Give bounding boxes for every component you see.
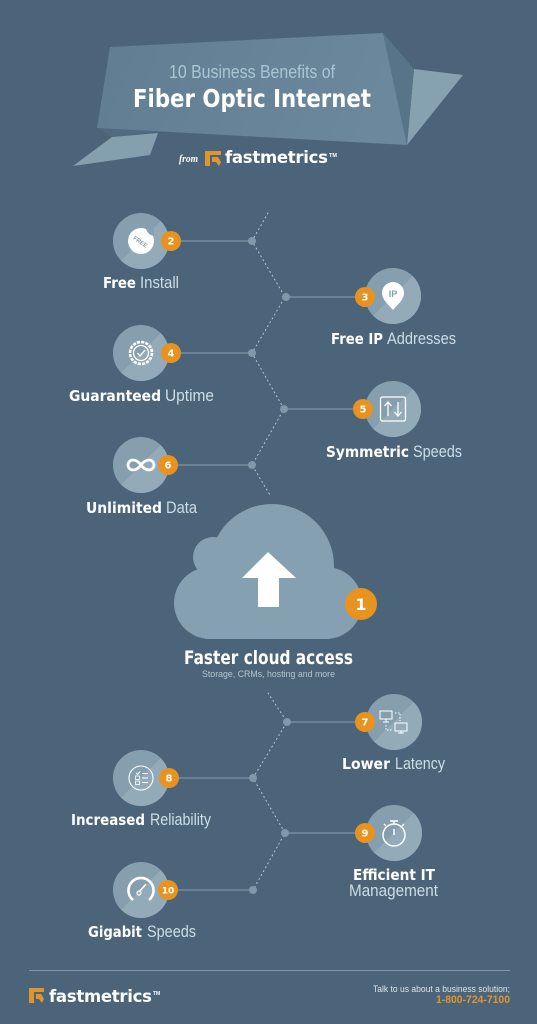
from fastmetrics logo — [179, 148, 337, 167]
label: Guaranteed — [69, 387, 161, 405]
benefit 7: lower latency — [283, 694, 446, 773]
label: Unlimited — [86, 499, 162, 517]
number badge: 1 — [355, 595, 367, 614]
number badge — [355, 712, 375, 732]
label: Efficient IT — [353, 866, 435, 884]
number badge — [158, 455, 178, 475]
number badge — [355, 823, 375, 843]
from label: from — [179, 154, 198, 165]
dotted connector upper — [252, 213, 285, 495]
banner title line 2: Fiber Optic Internet — [133, 84, 371, 113]
icon: check seal — [113, 325, 181, 393]
number badge — [355, 287, 375, 307]
connector — [180, 349, 256, 357]
label — [103, 274, 179, 292]
contact text: Talk to us about a business solution; — [373, 984, 510, 995]
label: Latency — [395, 755, 446, 773]
number badge — [161, 231, 181, 251]
label: Free — [103, 274, 136, 292]
benefit 6: unlimited data — [86, 437, 256, 517]
label — [342, 755, 446, 773]
label: Free IP — [331, 330, 383, 348]
connector — [281, 829, 356, 837]
icon: IP pin: IP — [389, 289, 397, 299]
number badge: 3 — [362, 292, 369, 304]
connector — [280, 405, 354, 413]
label: Speeds — [413, 443, 462, 461]
dotted connector lower — [253, 693, 287, 890]
connector — [178, 774, 257, 782]
label: Data — [166, 499, 198, 517]
benefit 8: increased reliability — [71, 750, 257, 829]
banner left fold — [97, 128, 158, 137]
icon: checklist — [113, 750, 181, 818]
connector — [178, 886, 257, 894]
icon: stopwatch — [366, 805, 434, 873]
number badge — [159, 768, 179, 788]
banner title line 1: 10 Business Benefits of — [169, 62, 336, 82]
label: Increased — [71, 811, 145, 829]
trademark: TM — [329, 153, 337, 159]
number badge: 2 — [168, 236, 175, 248]
benefit 10: gigabit speeds — [88, 862, 257, 941]
phone number: 1-800-724-7100 — [436, 994, 510, 1006]
banner left tail — [73, 133, 158, 166]
footer logo icon — [29, 988, 44, 1003]
icon: free sticker: FREE — [132, 236, 148, 250]
icon: infinity — [113, 437, 181, 505]
cloud — [174, 504, 362, 639]
label: Uptime — [165, 387, 214, 405]
number badge: 6 — [165, 460, 172, 472]
title banner — [73, 33, 463, 166]
heading: Faster cloud access — [184, 647, 353, 669]
label: Gigabit — [88, 923, 142, 941]
connector — [283, 718, 356, 726]
label: Symmetric — [326, 443, 409, 461]
banner right fold — [383, 33, 414, 145]
icon: IP pin — [365, 268, 433, 336]
benefit 4: guaranteed uptime — [69, 325, 256, 405]
benefit 9: efficient IT management — [281, 805, 438, 900]
number badge — [345, 588, 377, 620]
benefit 3: free IP addresses — [282, 268, 456, 348]
footer rule — [29, 970, 510, 972]
label — [71, 811, 212, 829]
benefit 1: faster cloud access — [174, 504, 377, 680]
connector — [180, 237, 256, 245]
logo wordmark: fastmetrics — [225, 148, 328, 167]
connector — [178, 461, 256, 469]
footer trademark: TM — [153, 991, 160, 997]
logo icon — [205, 151, 221, 166]
benefit 2: free install — [103, 213, 256, 292]
label: Lower — [342, 755, 390, 773]
footer — [29, 970, 510, 1006]
label — [349, 866, 438, 900]
label — [331, 330, 456, 348]
icon: free sticker — [113, 213, 181, 281]
icon: up down arrows — [365, 381, 433, 449]
number badge: 7 — [362, 718, 369, 728]
number badge — [158, 880, 178, 900]
number badge: 4 — [168, 348, 175, 360]
banner right tail — [407, 69, 463, 145]
label: Management — [349, 882, 438, 900]
label: Addresses — [387, 330, 456, 348]
label: Install — [140, 274, 179, 292]
icon: monitors — [366, 694, 434, 762]
number badge — [353, 399, 373, 419]
number badge: 5 — [360, 404, 367, 416]
sub text: Storage, CRMs, hosting and more — [202, 669, 335, 680]
banner main panel — [97, 33, 407, 145]
icon: up arrow — [242, 552, 296, 607]
number badge: 10 — [162, 886, 174, 896]
icon: speedometer — [113, 862, 181, 930]
number badge — [161, 343, 181, 363]
number badge: 8 — [166, 774, 173, 784]
number badge: 9 — [362, 828, 369, 840]
label — [326, 443, 462, 461]
label: Speeds — [147, 923, 196, 941]
connector — [282, 293, 356, 301]
footer logo wordmark: fastmetrics — [49, 987, 152, 1006]
benefit 5: symmetric speeds — [280, 381, 462, 461]
label — [88, 923, 196, 941]
label: Reliability — [150, 811, 212, 829]
